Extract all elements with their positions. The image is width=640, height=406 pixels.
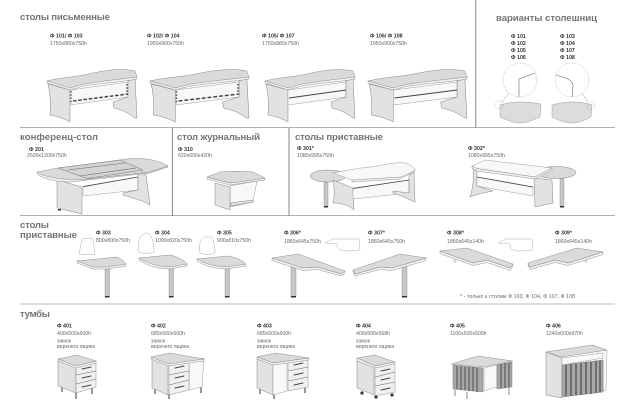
add-on desk Ф 301 [310, 162, 415, 210]
desk label Ф 101: 1750х880х750h [50, 41, 87, 47]
heading: стол журнальный: стол журнальный [177, 132, 260, 143]
heading: столы приставные (row 3): приставные [20, 230, 77, 241]
label Ф 403: замок [257, 338, 272, 344]
label Ф 310: Ф 310 [178, 147, 193, 153]
desk label Ф 101 [50, 34, 87, 47]
label Ф 401: замок [57, 338, 72, 344]
table Ф 307 [353, 254, 426, 298]
coffee table [207, 171, 265, 210]
heading: конференц-стол: конференц-стол [20, 132, 98, 143]
label Ф 301: 1080х995х750h [297, 153, 334, 159]
label Ф 308: Ф 308* [447, 230, 465, 236]
label Ф 309: Ф 309* [555, 230, 573, 236]
label Ф 305 [217, 230, 251, 244]
heading: столы приставные (row 3) [20, 220, 77, 241]
desk Ф 101 [47, 70, 137, 122]
label Ф 302: 1080х995х750h [468, 153, 505, 159]
desk Ф 106 [368, 70, 467, 122]
label Ф 404: замок [356, 338, 371, 344]
label Ф 308: 1860х645х140h [447, 239, 484, 245]
desk label Ф 106: 1950х900х750h [370, 41, 407, 47]
label Ф 308 [447, 230, 484, 245]
label Ф 406: Ф 406 [546, 324, 561, 330]
heading: столы приставные (row 3): столы [20, 220, 49, 231]
label Ф 404 [356, 324, 394, 350]
label Ф 302 [468, 146, 505, 159]
label Ф 401: Ф 401 [57, 324, 72, 330]
label Ф 306: Ф 306* [284, 230, 302, 236]
label Ф 404: 400х500х568h [356, 331, 390, 337]
label Ф 304: 1000х820х750h [155, 238, 192, 244]
pedestal Ф 401 [58, 355, 96, 399]
table Ф 304 [139, 255, 187, 298]
variant codes right: Ф 108 [560, 55, 575, 61]
variant codes right: Ф 104 [560, 41, 575, 47]
cabinet Ф 406 [546, 345, 607, 398]
label Ф 310 [178, 147, 212, 159]
table Ф 305 [197, 256, 246, 298]
label Ф 301: Ф 301* [297, 146, 315, 152]
label Ф 403: 685х500х600h [257, 331, 291, 337]
label Ф 402 [151, 324, 189, 350]
desk label Ф 102: 1950х900х750h [147, 41, 184, 47]
outline icon Ф 304 [138, 233, 154, 254]
label Ф 201 [27, 147, 67, 159]
desk label Ф 106: Ф 106/ Ф 108 [370, 34, 403, 40]
variant codes left: Ф 105 [511, 48, 526, 54]
variant codes right: Ф 107 [560, 48, 575, 54]
label Ф 402: Ф 402 [151, 324, 166, 330]
label Ф 307: 1860х645х750h [368, 239, 405, 245]
variant codes left: Ф 106 [511, 55, 526, 61]
label Ф 304 [155, 230, 192, 244]
label Ф 201: Ф 201 [29, 147, 44, 153]
label Ф 302: Ф 302* [468, 146, 486, 152]
label Ф 201: 2600х1200х750h [27, 153, 67, 159]
label Ф 404: Ф 404 [356, 324, 371, 330]
desk Ф 102 [150, 70, 249, 122]
label Ф 305: 900х810х750h [217, 238, 251, 244]
desk label Ф 102 [147, 34, 184, 47]
desk label Ф 105 [262, 34, 299, 47]
label Ф 310: 620х600х420h [178, 153, 212, 159]
footnote: * - только к столам Ф 103, Ф 104, Ф 107, Ф 108 [460, 294, 575, 300]
outline icon Ф 308 / 309 [498, 239, 533, 251]
variant codes left [511, 34, 526, 61]
table Ф 303 [77, 257, 126, 298]
label Ф 307 [368, 230, 405, 245]
label Ф 402: 685х500х600h [151, 331, 185, 337]
label Ф 309 [555, 230, 592, 245]
label Ф 401: 400х500х600h [57, 331, 91, 337]
label Ф 402: верхнего ящика [151, 344, 189, 350]
tabletop variant right [552, 63, 595, 123]
label Ф 301 [297, 146, 334, 159]
label Ф 303: Ф 303 [96, 230, 111, 236]
label Ф 304: Ф 304 [155, 230, 170, 236]
label Ф 402: замок [151, 338, 166, 344]
cabinet Ф 405 [451, 356, 513, 399]
label Ф 307: Ф 307* [368, 230, 386, 236]
outline icon Ф 305 [199, 237, 215, 254]
label Ф 309: 1860х645х140h [555, 239, 592, 245]
label Ф 306: 1860х645х750h [284, 239, 321, 245]
heading: варианты столешниц: варианты столешниц [496, 13, 597, 24]
label Ф 404: верхнего ящика [356, 344, 394, 350]
add-on desk Ф 302 [470, 160, 576, 208]
conference table [37, 158, 168, 214]
section dividers [20, 0, 615, 304]
desk label Ф 102: Ф 102/ Ф 104 [147, 34, 180, 40]
heading: тумбы: тумбы [20, 309, 50, 320]
table Ф 306 [272, 254, 345, 298]
outline icon Ф 303 [79, 238, 95, 255]
label Ф 405: Ф 405 [450, 324, 465, 330]
table Ф 309 [528, 248, 603, 270]
label Ф 401 [57, 324, 95, 350]
label Ф 401: верхнего ящика [57, 344, 95, 350]
label Ф 403: верхнего ящика [257, 344, 295, 350]
label Ф 403: Ф 403 [257, 324, 272, 330]
tabletop variant left [495, 63, 541, 123]
label Ф 406 [546, 324, 583, 337]
variant codes left: Ф 102 [511, 41, 526, 47]
label Ф 306 [284, 230, 321, 245]
desk label Ф 105: Ф 105/ Ф 107 [262, 34, 295, 40]
heading: столы приставные: столы приставные [295, 132, 383, 143]
variant codes right: Ф 103 [560, 34, 575, 40]
pedestal Ф 404 [357, 355, 395, 399]
label Ф 303 [96, 230, 130, 244]
desk label Ф 101: Ф 101/ Ф 103 [50, 34, 83, 40]
label Ф 406: 1240х600х970h [546, 331, 583, 337]
variant codes left: Ф 101 [511, 34, 526, 40]
label Ф 305: Ф 305 [217, 230, 232, 236]
pedestal Ф 403 [257, 353, 309, 399]
heading: столы письменные: столы письменные [20, 12, 110, 23]
desk label Ф 106 [370, 34, 407, 47]
label Ф 403 [257, 324, 295, 350]
label Ф 303: 800х800х750h [96, 238, 130, 244]
desk Ф 105 [265, 70, 355, 122]
desk label Ф 105: 1750х880х750h [262, 41, 299, 47]
variant codes right [560, 34, 575, 61]
pedestal Ф 402 [151, 353, 204, 399]
label Ф 405: 1100х500х600h [450, 331, 487, 337]
table Ф 308 [440, 248, 513, 270]
outline icon Ф 306 / 307 [325, 239, 360, 251]
label Ф 405 [450, 324, 487, 337]
